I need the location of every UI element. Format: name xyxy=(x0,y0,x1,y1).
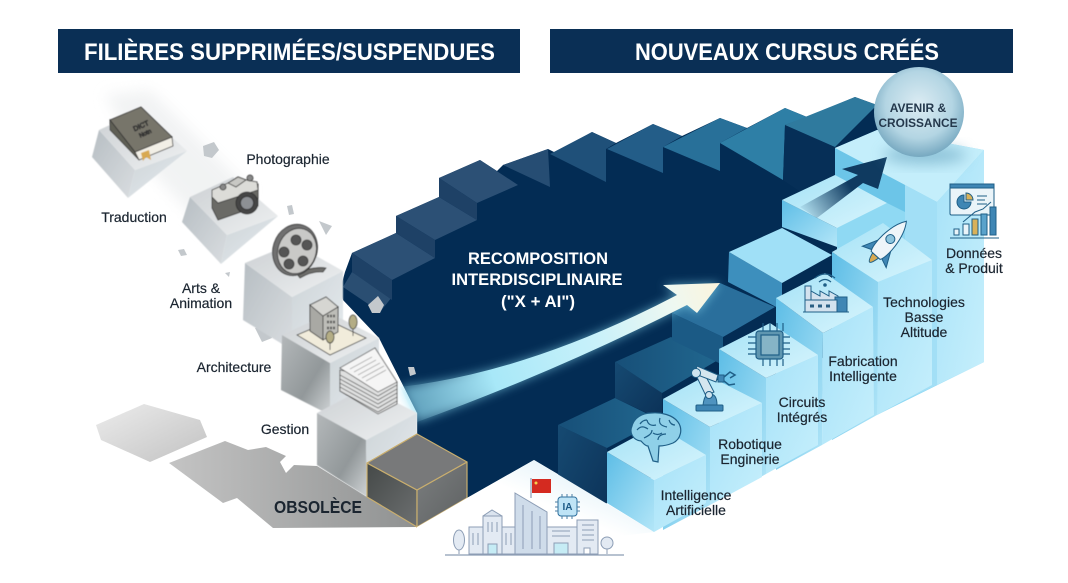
label: Technologies Basse Altitude xyxy=(883,294,965,340)
icon: building on plot xyxy=(297,297,366,355)
step: Robotique xyxy=(663,375,762,530)
sphere: Avenir & Croissance: AVENIR & xyxy=(890,101,947,115)
debris fragments xyxy=(178,142,416,376)
label: Arts and Animation xyxy=(170,280,232,311)
label: Traduction: Traduction xyxy=(101,209,167,225)
icon: dictionary: Notn xyxy=(139,129,153,139)
step: Fabrication Intelligente xyxy=(776,273,874,470)
icon: brain xyxy=(631,413,681,462)
label: Fabrication Intelligente xyxy=(828,353,898,384)
label: Gestion: Gestion xyxy=(261,421,309,437)
label: Arts and Animation: Animation xyxy=(170,295,232,311)
backing light mass xyxy=(835,130,984,415)
header: suppressed programs xyxy=(58,29,520,73)
label: Fabrication Intelligente: Intelligente xyxy=(829,368,897,384)
label: Technologies Basse Altitude: Technologies xyxy=(883,294,965,310)
light arrow: recomposition xyxy=(400,283,720,422)
central navy staircase void xyxy=(340,97,900,503)
label: Robotique Enginerie: Enginerie xyxy=(720,451,780,467)
sphere: Avenir & Croissance: CROISSANCE xyxy=(878,116,958,130)
shadow: obsolete ground xyxy=(169,441,417,528)
text: recomposition: INTERDISCIPLINAIRE xyxy=(452,271,622,289)
icon: rocket xyxy=(858,211,918,273)
icon: AI chip xyxy=(555,494,580,519)
label: Intelligence Artificielle: Intelligence xyxy=(661,487,732,503)
right staircase light cubes xyxy=(607,130,984,532)
step: upper landing xyxy=(782,175,905,262)
faded trail behind falling steps xyxy=(105,90,250,235)
label: Robotique Enginerie: Robotique xyxy=(718,436,782,452)
icon: AI chip: IA xyxy=(562,502,572,513)
step: Architecture xyxy=(281,297,379,415)
label: Intelligence Artificielle xyxy=(661,487,732,518)
dark growth arrow xyxy=(800,157,887,218)
label: Robotique Enginerie xyxy=(718,436,782,467)
icon: film reel xyxy=(266,218,326,282)
step: Arts & Animation xyxy=(243,218,343,350)
step: Intelligence Artificielle xyxy=(607,425,706,532)
icon: microchip xyxy=(748,323,790,366)
icon: dictionary: DICT xyxy=(133,120,151,133)
step: top landing xyxy=(835,130,984,260)
label: Technologies Basse Altitude: Basse xyxy=(905,309,944,325)
shadow: lighter slab xyxy=(96,404,207,462)
step: Photographie xyxy=(182,175,278,264)
label: Circuits Intégrés: Intégrés xyxy=(777,409,827,425)
header: new programs xyxy=(550,29,1013,73)
text: recomposition: RECOMPOSITION xyxy=(468,250,608,268)
label: Données & Produit xyxy=(945,245,1003,276)
header: suppressed programs: FILIÈRES SUPPRIMÉES/SUSPENDUES xyxy=(84,38,495,66)
step: Technologies Basse Altitude xyxy=(832,223,932,440)
label: Intelligence Artificielle: Artificielle xyxy=(666,502,726,518)
sphere: Avenir & Croissance xyxy=(874,67,967,164)
label: Technologies Basse Altitude: Altitude xyxy=(901,324,948,340)
icon: data dashboard xyxy=(950,184,999,238)
label: Fabrication Intelligente: Fabrication xyxy=(828,353,898,369)
step: Traduction xyxy=(92,107,187,198)
step: Données & Produit xyxy=(905,150,984,400)
icon: dictionary xyxy=(110,107,173,161)
ground line xyxy=(445,554,624,556)
step: Circuits Intégrés xyxy=(719,323,818,500)
obsolete gold-edged cube xyxy=(367,434,467,527)
white triangle with city xyxy=(417,460,654,560)
back stair steps xyxy=(343,97,877,312)
label: Données & Produit: & Produit xyxy=(945,260,1003,276)
icon: chinese flag xyxy=(531,478,551,498)
label: Arts and Animation: Arts & xyxy=(182,280,221,296)
icon: camera xyxy=(212,175,258,220)
header: new programs: NOUVEAUX CURSUS CRÉÉS xyxy=(635,38,939,66)
label: Architecture: Architecture xyxy=(197,359,272,375)
step: Gestion xyxy=(317,348,417,497)
icon: city skyline xyxy=(454,493,613,554)
text: recomposition: ("X + AI") xyxy=(501,293,575,311)
label: Circuits Intégrés xyxy=(777,394,827,425)
text: recomposition xyxy=(452,250,622,311)
label: Données & Produit: Données xyxy=(946,245,1002,261)
icon: smart factory xyxy=(803,274,849,312)
label: Photographie: Photographie xyxy=(246,151,330,167)
icon: robot arm xyxy=(692,366,735,411)
right teal back stairs xyxy=(558,228,832,525)
label: Circuits Intégrés: Circuits xyxy=(779,394,825,410)
label: OBSOLÈCE: OBSOLÈCE xyxy=(274,496,362,517)
icon: paper stack xyxy=(340,348,397,414)
